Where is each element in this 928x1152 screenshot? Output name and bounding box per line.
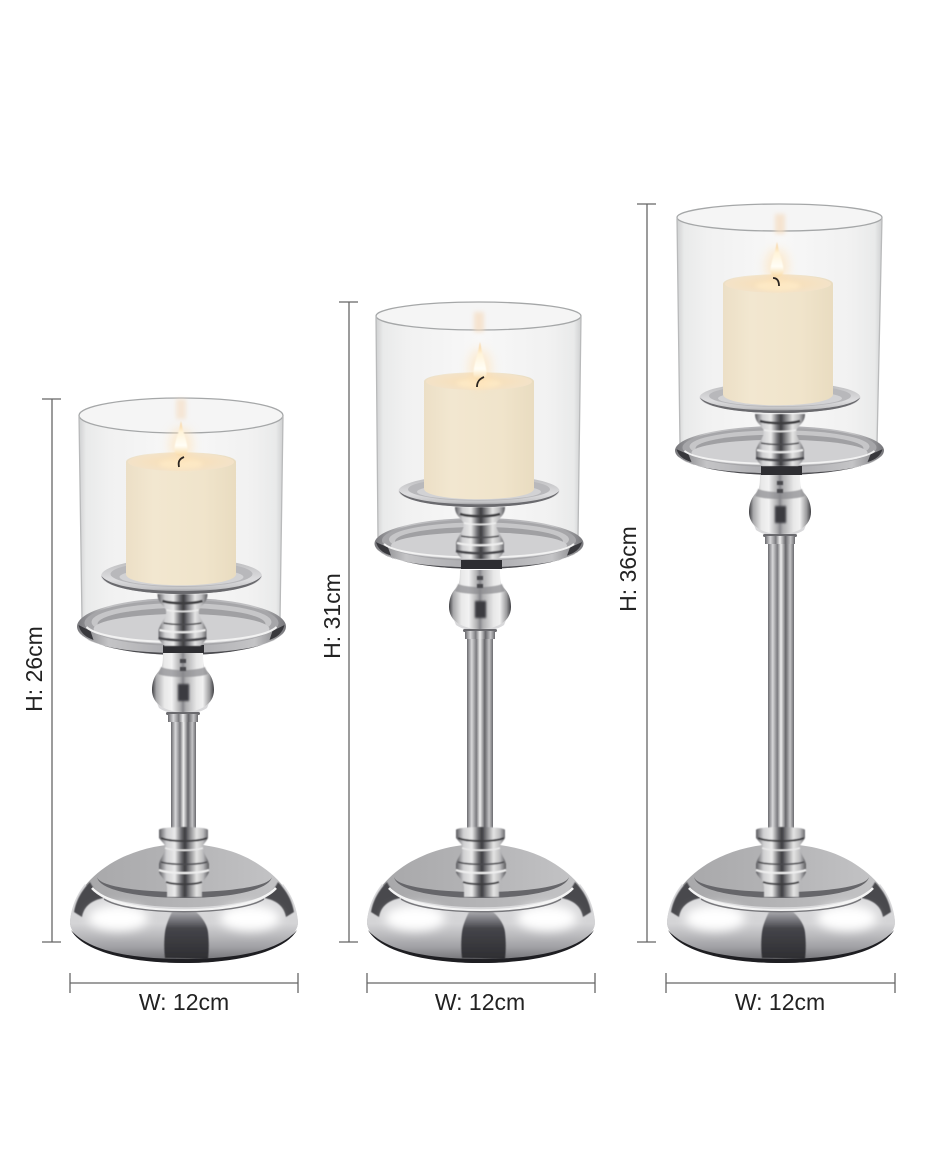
- wick: [179, 457, 184, 467]
- stem: [467, 637, 493, 832]
- candle dish: [700, 382, 860, 413]
- glass cylinder: [677, 204, 882, 445]
- candle holder: medium: [367, 302, 595, 963]
- height dimension: large: [615, 204, 656, 942]
- ball joint: [749, 475, 811, 544]
- tray: [77, 598, 286, 655]
- label: height 31cm: H: 31cm: [319, 573, 345, 659]
- label: height 26cm: H: 26cm: [21, 626, 47, 712]
- tray: [675, 426, 884, 475]
- candle: [126, 452, 236, 585]
- width dimension: small: [70, 973, 298, 1015]
- candle: [424, 372, 534, 499]
- width dimension: large: [666, 973, 895, 1015]
- label: width 12cm: W: 12cm: [435, 989, 525, 1015]
- flame: [169, 421, 193, 463]
- neck: [755, 414, 805, 466]
- candle: [723, 274, 833, 405]
- dark band under tray: [461, 560, 502, 569]
- glass cylinder: [376, 302, 581, 538]
- neck: [158, 594, 208, 646]
- lower collar: [456, 827, 506, 897]
- flame: [468, 342, 492, 388]
- candle dish: [101, 558, 262, 594]
- wick: [477, 377, 484, 387]
- label: height 36cm: H: 36cm: [615, 526, 641, 612]
- candle holder: small: [70, 398, 298, 963]
- height dimension: small: [21, 399, 61, 942]
- base: [70, 844, 298, 963]
- width dimension: medium: [367, 973, 595, 1015]
- lower collar: [159, 827, 209, 897]
- candle dish: [398, 475, 560, 507]
- dark band under tray: [761, 466, 802, 475]
- lower collar: [756, 827, 806, 897]
- label: width 12cm: W: 12cm: [735, 989, 825, 1015]
- ball joint: [449, 570, 511, 639]
- base: [367, 844, 595, 963]
- wick: [773, 278, 779, 286]
- label: width 12cm: W: 12cm: [139, 989, 229, 1015]
- ball joint: [152, 653, 214, 722]
- candle holder: large: [667, 204, 895, 963]
- dark band under tray: [163, 645, 204, 653]
- stem: [768, 542, 794, 832]
- tray: [374, 518, 584, 569]
- height dimension: medium: [319, 302, 358, 942]
- neck: [455, 507, 505, 559]
- stem: [171, 720, 196, 832]
- base: [667, 844, 895, 963]
- glass cylinder: [79, 398, 283, 620]
- flame: [765, 242, 789, 284]
